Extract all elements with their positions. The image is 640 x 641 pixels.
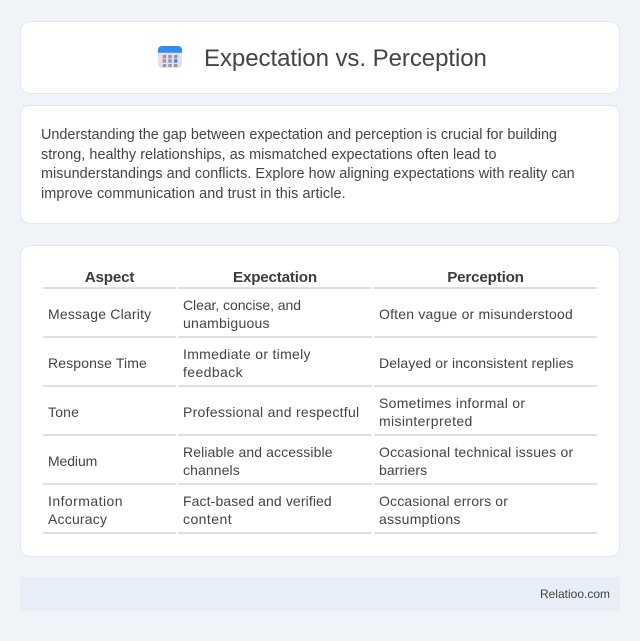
cell: medium perception: barriers — [379, 462, 427, 478]
text block: introduction: Understanding the gap between expectation and perception is crucial for building — [41, 127, 557, 143]
cell: information accuracy perception: assumptions — [379, 511, 461, 527]
column heading: perception: Perception — [447, 269, 524, 286]
row: message clarity: Message Clarity — [48, 306, 151, 322]
icon: calendar — [158, 46, 182, 68]
cell: message clarity perception: Often vague or misunderstood — [379, 306, 573, 322]
cell: medium expectation: channels — [183, 462, 240, 478]
cell: information accuracy perception: Occasional errors or — [379, 493, 508, 509]
cell: tone expectation: Professional and respectful — [183, 404, 359, 420]
cell: medium perception — [379, 444, 573, 478]
cell: message clarity expectation: Clear, concise, and — [183, 297, 301, 313]
column heading: aspect: Aspect — [85, 269, 134, 286]
cell: medium perception: Occasional technical issues or — [379, 444, 573, 460]
row: tone: Tone — [48, 404, 79, 420]
table: expectation vs perception — [43, 269, 597, 534]
cell: information accuracy expectation: content — [183, 511, 232, 527]
cell: medium expectation — [183, 444, 333, 478]
cell: tone perception: Sometimes informal or — [379, 395, 525, 411]
column heading: expectation: Expectation — [233, 269, 317, 286]
cell: response time expectation: Immediate or timely — [183, 346, 311, 362]
row: information accuracy: Accuracy — [48, 511, 107, 527]
panel: comparison table — [20, 245, 620, 557]
cell: message clarity expectation — [183, 297, 301, 331]
text block: introduction: improve communication and trust in this article. — [41, 186, 346, 202]
cell: tone perception: misinterpreted — [379, 413, 473, 429]
panel: title card — [20, 21, 620, 94]
text block: introduction: strong, healthy relationships, as mismatched expectations often lead to — [41, 146, 497, 162]
cell: information accuracy expectation: Fact-based and verified — [183, 493, 332, 509]
row: information accuracy — [48, 493, 123, 527]
row: medium: Medium — [48, 453, 97, 469]
text block: introduction: misunderstandings and conflicts. Explore how aligning expectations with reality can — [41, 166, 575, 182]
cell: tone perception — [379, 395, 525, 429]
row: response time: Response Time — [48, 355, 147, 371]
cell: response time expectation — [183, 346, 311, 380]
text block: introduction — [41, 127, 575, 202]
cell: response time expectation: feedback — [183, 364, 243, 380]
title: Expectation vs. Perception — [204, 45, 487, 72]
panel: introduction — [20, 105, 620, 224]
cell: information accuracy expectation — [183, 493, 332, 527]
row: information accuracy: Information — [48, 493, 123, 509]
cell: medium expectation: Reliable and accessible — [183, 444, 333, 460]
cell: information accuracy perception — [379, 493, 508, 527]
cell: response time perception: Delayed or inconsistent replies — [379, 355, 574, 371]
footer text: site name: Relatioo.com — [540, 586, 610, 600]
footer — [20, 577, 620, 611]
cell: message clarity expectation: unambiguous — [183, 315, 270, 331]
